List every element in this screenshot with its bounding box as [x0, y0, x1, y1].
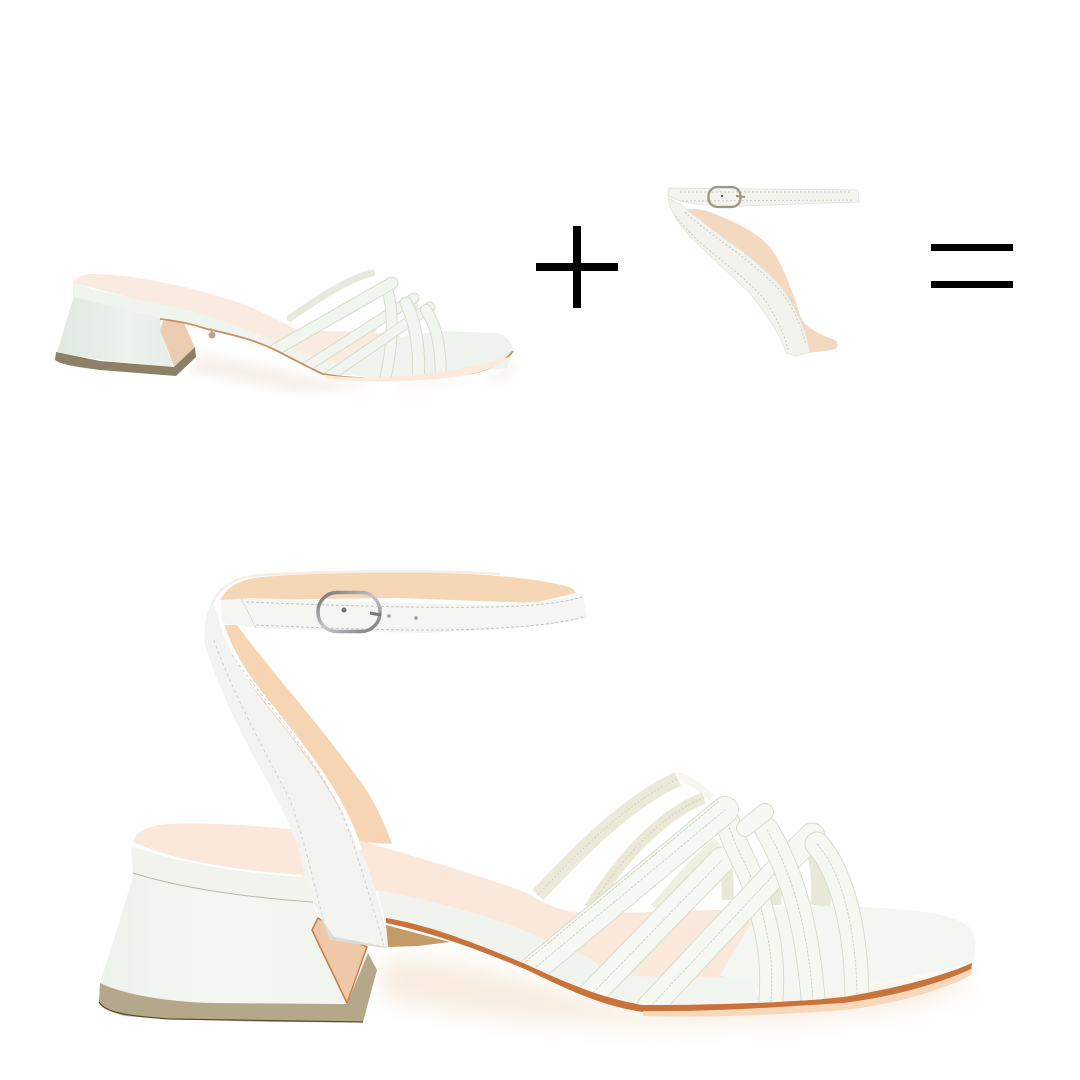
belt holes — [387, 614, 418, 620]
heel inner face — [312, 918, 367, 1003]
large assembled sandal — [99, 571, 975, 1026]
mule welt — [73, 283, 400, 378]
small ankle strap — [668, 187, 859, 356]
midfoot sole edge — [386, 918, 972, 1013]
strap C — [650, 836, 812, 1007]
plus sign — [536, 226, 618, 308]
front crossing straps — [523, 802, 857, 1012]
mule hanging stud — [208, 328, 216, 338]
strap E — [767, 830, 814, 1012]
shank under arch — [386, 925, 450, 947]
ankle belt stitching — [680, 192, 852, 201]
mule insole — [73, 274, 400, 368]
strap overlap over heel shadow — [320, 917, 388, 948]
strap top crossing — [745, 812, 765, 828]
mule toe bed — [325, 331, 513, 379]
strap F — [817, 844, 857, 1010]
ankle buckle — [708, 187, 745, 207]
midfoot welt — [377, 890, 640, 1003]
strap A — [523, 802, 725, 972]
mule heel sole — [55, 347, 196, 376]
small mule sandal — [55, 273, 520, 392]
back lining of side strap — [223, 625, 392, 844]
mule sole face — [325, 357, 509, 382]
sole lower face — [643, 969, 971, 1017]
insole — [133, 823, 780, 985]
toe bed — [720, 906, 975, 998]
side strap — [204, 602, 388, 947]
buckle — [318, 592, 381, 632]
strap B — [588, 860, 722, 998]
infographic canvas — [55, 186, 1013, 1033]
equals sign — [931, 244, 1013, 288]
heel seat welt — [131, 846, 320, 902]
ankle strap belt — [221, 594, 587, 633]
strap D — [727, 820, 772, 1012]
heel sole plate — [99, 953, 377, 1022]
mule back straps — [290, 273, 414, 335]
floor shadow — [380, 959, 970, 1026]
ankle strap stitching — [676, 212, 806, 350]
mule heel inner — [160, 320, 195, 368]
side strap stitching — [214, 640, 384, 945]
ankle strap lining — [683, 209, 838, 354]
ankle strap side panel — [668, 198, 810, 356]
mule sole edge — [160, 319, 513, 379]
mule heel block — [57, 296, 173, 367]
ankle strap belt — [668, 188, 859, 206]
mule front straps — [266, 283, 441, 385]
rear inner straps — [538, 776, 821, 908]
ankle loop lining — [220, 572, 576, 603]
heel block — [100, 875, 347, 1003]
